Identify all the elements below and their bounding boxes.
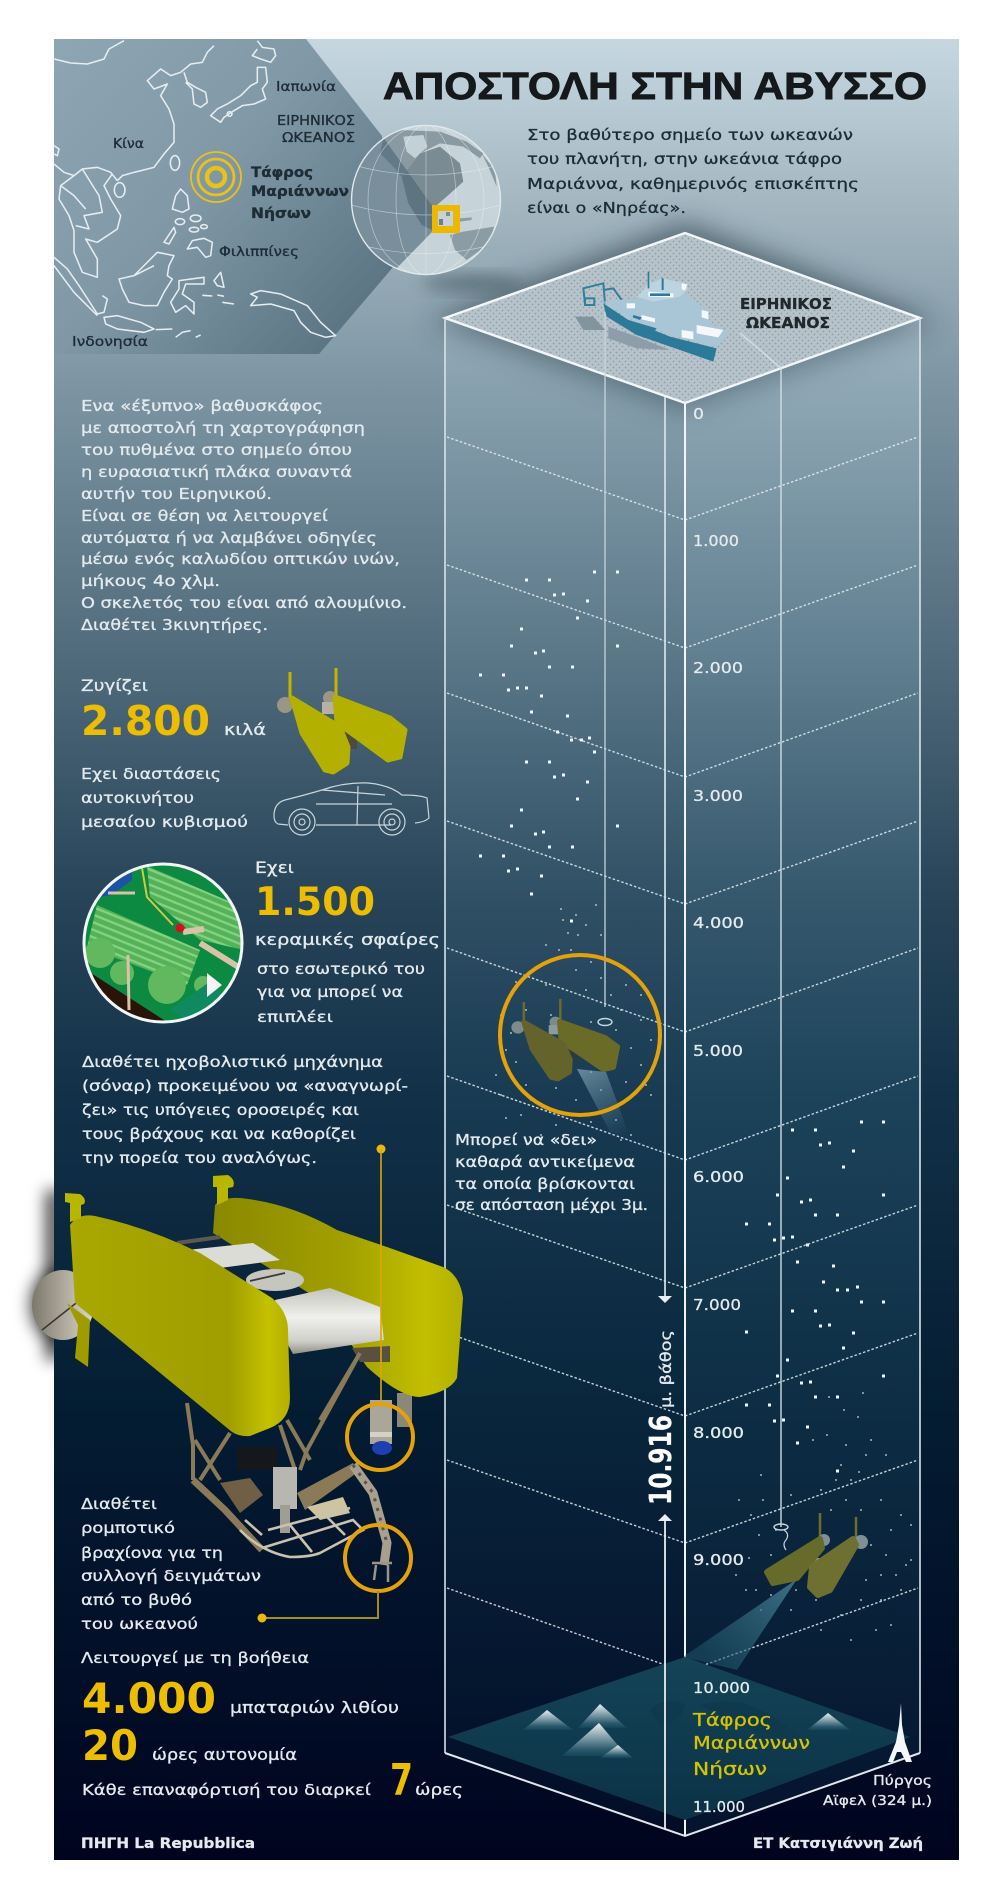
map: label Mariana Trench: Νήσων (251, 206, 311, 222)
stat: ceramic spheres: 1.500 (255, 880, 375, 925)
stat: ceramic spheres: κεραμικές σφαίρες (255, 930, 440, 949)
credit: ΕΤ Κατσιγιάννη Ζωή (753, 1836, 923, 1852)
text block: car size: αυτοκινήτου (81, 789, 194, 807)
beam: sonar light (577, 1069, 630, 1137)
map: label Japan: Ιαπωνία (276, 80, 336, 95)
cable hook (598, 1018, 612, 1026)
stat: batteries: μπαταριών λιθίου (230, 1698, 399, 1717)
text block: description: Διαθέτει 3κινητήρες. (81, 616, 268, 634)
text block: description: αυτόματα ή να λαμβάνει οδηγίες (81, 529, 377, 547)
text block: vision range: σε απόσταση μέχρι 3μ. (455, 1196, 648, 1214)
depth label (644, 1330, 679, 1505)
shadow: large ROV on page edge (30, 1190, 90, 1360)
label: Mariana Trench (692, 1710, 810, 1780)
icon: ROV pods (277, 668, 405, 772)
text block: robotic arm: ρομποτικό (81, 1519, 175, 1537)
depth scale: 5.000 (693, 1042, 743, 1060)
depth scale: 9.000 (693, 1551, 744, 1569)
stat: autonomy (82, 1721, 297, 1770)
text block: car size: Εχει διαστάσεις (81, 765, 221, 783)
label: Pacific Ocean on surface: ΕΙΡΗΝΙΚΟΣ (740, 295, 832, 313)
cable: right (740, 333, 781, 1527)
label: Eiffel tower height: Αϊφελ (324 μ.) (823, 1793, 932, 1809)
stat: ceramic spheres: για να μπορεί να (257, 983, 403, 1001)
stat: ceramic spheres (255, 858, 440, 1026)
stat: autonomy: 20 (82, 1721, 138, 1770)
label: Pacific Ocean on surface: ΩΚΕΑΝΟΣ (746, 314, 830, 332)
title: ΑΠΟΣΤΟΛΗ ΣΤΗΝ ΑΒΥΣΣΟ (383, 66, 927, 108)
text block: description: η ευρασιατική πλάκα συναντά (81, 463, 352, 481)
column: left face (445, 318, 685, 1836)
text block: vision range (455, 1131, 648, 1214)
depth arrow (658, 397, 672, 1830)
stat: recharge: 7 (390, 1755, 413, 1806)
source: ΠΗΓΗ La Repubblica (81, 1836, 255, 1852)
icon: Eiffel tower (888, 1703, 912, 1762)
depth scale: 3.000 (693, 787, 743, 805)
text block: description: του πυθμένα στο σημείο όπου (81, 441, 352, 459)
shadow: around cube top (430, 222, 935, 410)
stat: weight: Ζυγίζει (81, 676, 148, 695)
ROV: rear mast (213, 1175, 234, 1205)
icon: ROV small (511, 999, 618, 1079)
stat: batteries: 4.000 (82, 1674, 216, 1723)
text block: description: με αποστολή τη χαρτογράφηση (81, 419, 365, 437)
seabed (448, 1657, 910, 1820)
map: label Mariana Trench: Μαριάννων (251, 184, 349, 200)
ROV: equipment (220, 1447, 358, 1533)
label: Eiffel tower height (823, 1773, 932, 1809)
ROV: lower frame (187, 1353, 360, 1550)
label: Mariana Trench: Νήσων (693, 1759, 767, 1780)
text block: description: μήκους 4ο χλμ. (81, 572, 220, 590)
text block: description (81, 397, 407, 634)
label: Mariana Trench: Μαριάννων (693, 1733, 810, 1754)
map: label Philippines: Φιλιππίνες (219, 245, 299, 260)
map: label China: Κίνα (113, 137, 144, 152)
column: right face (685, 318, 920, 1836)
text block: description: αυτήν του Ειρηνικού. (81, 485, 272, 503)
map: coastlines (54, 41, 336, 337)
map: label Pacific Ocean: ΩΚΕΑΝΟΣ (282, 131, 355, 146)
depth scale: 2.000 (693, 659, 743, 677)
text block: description: Ο σκελετός του είναι από αλουμίνιο. (81, 594, 407, 612)
stat: weight: κιλά (224, 720, 266, 739)
text block: intro: είναι ο «Νηρέας». (527, 199, 686, 217)
map: label Mariana Trench (251, 165, 349, 222)
depth scale: 11.000 (693, 1798, 745, 1816)
text block: description: Είναι σε θέση να λειτουργεί (81, 507, 329, 525)
stat: weight: 2.800 (81, 697, 210, 745)
ROV: basket (240, 1508, 363, 1557)
text block: robotic arm: βραχίονα για τη (81, 1544, 223, 1562)
stat: recharge: ώρες (415, 1780, 463, 1799)
text block: intro: Στο βαθύτερο σημείο των ωκεανών (527, 126, 853, 144)
depth scale: 7.000 (693, 1296, 741, 1314)
depth scale: 0 (693, 405, 704, 423)
icon: ROV at bottom with beam (683, 1513, 868, 1670)
depth scale: 1.000 (693, 532, 739, 550)
text block: description: Ενα «έξυπνο» βαθυσκάφος (81, 397, 323, 415)
text block: sonar: τους βράχους και να καθορίζει (82, 1125, 356, 1143)
ring (500, 955, 660, 1115)
label: Mariana Trench: Τάφρος (692, 1710, 772, 1731)
map: label Mariana Trench: Τάφρος (251, 165, 313, 181)
map: label Pacific Ocean: ΕΙΡΗΝΙΚΟΣ (277, 114, 355, 129)
ROV: front mast (65, 1193, 85, 1222)
text block: vision range: καθαρά αντικείμενα (455, 1153, 635, 1171)
map: label Pacific Ocean (277, 114, 355, 146)
ROV: decks (177, 1237, 390, 1420)
text block: intro: Μαριάννα, καθημερινός επισκέπτης (527, 175, 859, 193)
stat: autonomy: ώρες αυτονομία (152, 1745, 297, 1764)
ROV: mounting strut (67, 1303, 90, 1367)
particles: marine snow (479, 572, 912, 1640)
ROV: manipulator arm (353, 1465, 392, 1582)
text block: sonar: Διαθέτει ηχοβολιστικό μηχάνημα (82, 1053, 383, 1071)
cable: left (604, 312, 606, 1007)
icon: globe (340, 125, 522, 291)
text block: car size: μεσαίου κυβισμού (81, 813, 248, 831)
panel: locator map (54, 39, 394, 354)
callout: sonar (347, 1144, 413, 1470)
ship (575, 272, 730, 362)
depth scale: 8.000 (693, 1424, 744, 1442)
text block: sonar (82, 1053, 408, 1167)
text block: car size (81, 765, 248, 831)
depth scale (693, 405, 750, 1816)
depth label: 10.916 (644, 1415, 679, 1505)
icon: car outline (274, 783, 429, 835)
label: Pacific Ocean on surface (740, 295, 832, 332)
stat: batteries (81, 1649, 399, 1723)
ROV: sonar unit (370, 1393, 412, 1455)
illustration: large ROV (32, 1175, 463, 1582)
stat: ceramic spheres: Εχει (255, 858, 294, 877)
text block: robotic arm: από το βυθό (81, 1591, 192, 1609)
stat: recharge: Κάθε επαναφόρτισή του διαρκεί (82, 1781, 372, 1799)
text block: intro (527, 126, 859, 217)
callout: robotic arm (258, 1525, 411, 1622)
stat: weight (81, 676, 266, 745)
column: sea surface (445, 233, 920, 403)
text block: robotic arm: συλλογή δειγμάτων (81, 1567, 261, 1585)
text block: sonar: την πορεία του αναλόγως. (82, 1149, 317, 1167)
text block: vision range: Μπορεί να «δει» (455, 1131, 597, 1149)
ROV: front pod (70, 1215, 290, 1436)
label: Eiffel tower height: Πύργος (873, 1773, 932, 1789)
sonar zoom circle with ROV (500, 955, 660, 1137)
text block: intro: του πλανήτη, στην ωκεάνια τάφρο (527, 150, 842, 168)
inset: ceramic spheres (82, 862, 244, 1024)
ROV: rear pod (213, 1198, 463, 1397)
ROV: propeller (32, 1270, 94, 1340)
stat: ceramic spheres: επιπλέει (257, 1008, 333, 1026)
globe: highlighted square (432, 205, 460, 233)
text block: description: μέσω ενός καλωδίου οπτικών ινών, (81, 550, 400, 568)
depth scale: 10.000 (693, 1679, 750, 1697)
text block: robotic arm: του ωκεανού (81, 1615, 198, 1633)
stat: batteries: Λειτουργεί με τη βοήθεια (81, 1649, 309, 1667)
map: label Indonesia: Ινδονησία (72, 335, 148, 350)
depth scale: 4.000 (693, 914, 744, 932)
icon: trench target (191, 152, 241, 202)
text block: vision range: τα οποία βρίσκονται (455, 1175, 635, 1193)
text block: robotic arm (81, 1495, 261, 1633)
depth scale: 6.000 (693, 1168, 744, 1186)
text block: robotic arm: Διαθέτει (81, 1495, 157, 1513)
text block: sonar: ζει» τις υπόγειες οροσειρές και (82, 1101, 359, 1119)
chart: ocean depth column (32, 233, 932, 1852)
depth label: μ. βάθος (657, 1330, 675, 1408)
text block: sonar: (σόναρ) προκειμένου να «αναγνωρί- (82, 1077, 408, 1095)
stat: ceramic spheres: στο εσωτερικό του (257, 960, 425, 978)
stat: recharge (82, 1755, 463, 1806)
